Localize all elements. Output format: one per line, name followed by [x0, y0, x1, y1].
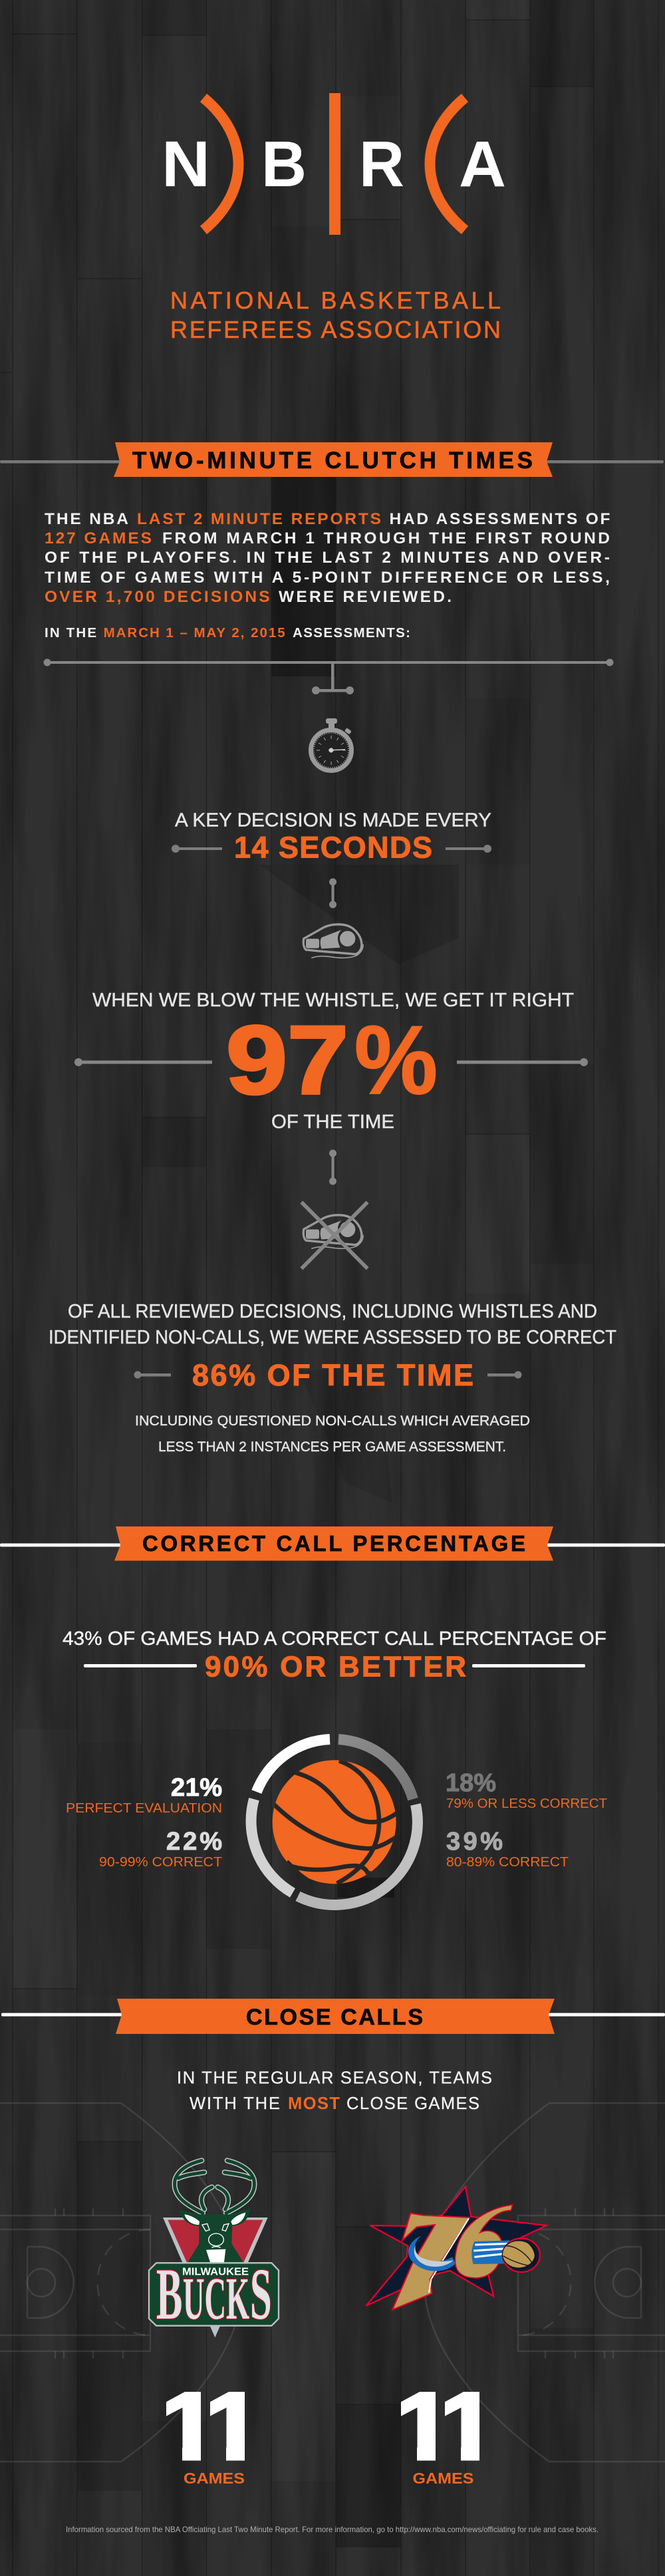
logo: NBRA: A — [459, 128, 506, 200]
footer source note: Information sourced from the NBA Officiating Last Two Minute Report. For more information, go to http://www.nba.com/news/officiating for rule and case books. — [66, 2525, 598, 2534]
label: 39% 80-89 correct — [446, 1828, 569, 1870]
logo: NBRA — [162, 93, 506, 235]
text: all reviewed decisions: IDENTIFIED NON-CALLS, WE WERE ASSESSED TO BE CORRECT — [49, 1327, 616, 1348]
logo: Milwaukee Bucks: MILWAUKEE — [182, 2267, 249, 2278]
label: games: GAMES — [412, 2470, 473, 2487]
number: 11 — [401, 2392, 479, 2461]
stat: 90% or better — [84, 1651, 585, 1683]
text: 43% of games: 43% OF GAMES HAD A CORRECT CALL PERCENTAGE OF — [63, 1628, 606, 1649]
text: regular season: CLOSE GAMES — [346, 2094, 479, 2113]
intro paragraph: TIME OF GAMES WITH A 5-POINT DIFFERENCE OR LESS, — [45, 569, 610, 587]
stat: 97%: % — [354, 1006, 438, 1114]
intro paragraph: 127 GAMES — [45, 529, 152, 547]
text: regular season: MOST — [288, 2094, 340, 2113]
section banner: two-minute clutch times: TWO-MINUTE CLUTCH TIMES — [132, 448, 533, 474]
icon: stopwatch — [311, 718, 352, 770]
stat: 76ers 11 games — [401, 2392, 479, 2484]
assessments subheading: MARCH 1 – MAY 2, 2015 — [104, 625, 285, 641]
stat: 90% or better: 90% OR BETTER — [205, 1651, 466, 1683]
label: 21% perfect evaluation: PERFECT EVALUATION — [66, 1800, 222, 1816]
assessments subheading — [45, 625, 410, 641]
donut segment: 18% 79 or less — [338, 1739, 413, 1799]
intro paragraph — [45, 510, 610, 606]
logo: NBRA: R — [359, 128, 404, 200]
organisation name: NATIONAL BASKETBALL — [170, 287, 501, 314]
logo: Milwaukee Bucks: B — [156, 2253, 182, 2335]
icon: basketball — [273, 1760, 399, 1887]
logo: NBRA: N — [162, 128, 210, 200]
icon: crossed-out whistle — [301, 1202, 368, 1268]
chart: donut with basketball — [251, 1739, 418, 1905]
section banner: close calls: CLOSE CALLS — [246, 2005, 423, 2030]
text: questioned non-calls: INCLUDING QUESTIONED NON-CALLS WHICH AVERAGED — [135, 1413, 530, 1429]
logo: NBRA: B — [261, 128, 307, 200]
intro paragraph: THE NBA — [45, 510, 128, 528]
label: games: GAMES — [184, 2470, 245, 2487]
text: questioned non-calls: LESS THAN 2 INSTANCES PER GAME ASSESSMENT. — [158, 1439, 506, 1455]
stat: 14 seconds: 14 SECONDS — [234, 830, 432, 865]
stat: 97% — [74, 1006, 588, 1114]
label: 21% perfect evaluation: 21% — [171, 1774, 222, 1802]
connector: tree — [44, 658, 613, 694]
text: all reviewed decisions — [49, 1301, 616, 1348]
label: 18% 79 or less: 79% OR LESS CORRECT — [446, 1796, 607, 1811]
logo: Milwaukee Bucks — [149, 2160, 279, 2337]
intro paragraph: OVER 1,700 DECISIONS — [45, 588, 270, 606]
label: 39% 80-89 correct: 39% — [446, 1828, 503, 1856]
stat: 97%: 97 — [226, 1006, 348, 1114]
intro paragraph: LAST 2 MINUTE REPORTS — [137, 510, 381, 528]
donut segment: 39% 80-89 correct — [298, 1804, 418, 1905]
text: regular season: WITH THE — [190, 2094, 280, 2113]
text: regular season — [177, 2069, 492, 2113]
logo: Philadelphia 76ers — [366, 2186, 547, 2310]
text: of the time: OF THE TIME — [271, 1111, 394, 1133]
number: 11: 1 — [202, 2374, 265, 2480]
text: blow the whistle: WHEN WE BLOW THE WHISTLE, WE GET IT RIGHT — [92, 990, 574, 1011]
intro paragraph: WERE REVIEWED. — [279, 588, 452, 606]
section banner: close calls — [1, 1999, 665, 2034]
section banner: correct call percentage: CORRECT CALL PERCENTAGE — [142, 1531, 525, 1556]
assessments subheading: ASSESSMENTS: — [293, 625, 410, 641]
text: regular season: IN THE REGULAR SEASON, TEAMS — [177, 2069, 492, 2087]
intro paragraph: FROM MARCH 1 THROUGH THE FIRST ROUND — [162, 529, 610, 547]
connector: to whistle — [329, 878, 336, 909]
label: 39% 80-89 correct: 80-89% CORRECT — [446, 1854, 569, 1870]
intro paragraph: OF THE PLAYOFFS. IN THE LAST 2 MINUTES AND OVER- — [45, 549, 610, 567]
logo: Milwaukee Bucks: UCK — [183, 2266, 249, 2332]
donut segment: 22% 90-99 correct — [251, 1799, 293, 1893]
stat: bucks 11 games — [166, 2392, 245, 2484]
connector: to crossed whistle — [329, 1149, 336, 1185]
intro paragraph: HAD ASSESSMENTS OF — [390, 510, 610, 528]
court lines watermark — [0, 2103, 665, 2462]
section banner: two-minute clutch times — [0, 442, 664, 477]
stat: 14 seconds — [172, 830, 491, 865]
text: questioned non-calls — [135, 1413, 530, 1455]
label: 18% 79 or less — [446, 1769, 607, 1811]
label: 18% 79 or less: 18% — [446, 1769, 496, 1797]
organisation name: REFEREES ASSOCIATION — [170, 316, 501, 343]
icon: whistle — [303, 925, 363, 958]
organisation name — [170, 287, 501, 343]
number: 11: 1 — [158, 2374, 221, 2480]
number: 11 — [166, 2392, 245, 2461]
number: 11: 1 — [393, 2374, 456, 2480]
donut segment: 21% perfect evaluation — [257, 1739, 330, 1792]
logo: Milwaukee Bucks: S — [250, 2253, 272, 2335]
section banner: correct call percentage — [0, 1526, 665, 1560]
label: 21% perfect evaluation — [66, 1774, 222, 1816]
text: key decision: A KEY DECISION IS MADE EVERY — [175, 810, 491, 831]
text: all reviewed decisions: OF ALL REVIEWED DECISIONS, INCLUDING WHISTLES AND — [68, 1301, 597, 1322]
label: 22% 90-99 correct: 90-99% CORRECT — [99, 1854, 222, 1870]
label: 22% 90-99 correct: 22% — [166, 1828, 222, 1856]
number: 11: 1 — [437, 2374, 500, 2480]
stat: 86% of the time: 86% OF THE TIME — [192, 1358, 473, 1392]
label: 22% 90-99 correct — [99, 1828, 222, 1870]
assessments subheading: IN THE — [45, 625, 96, 641]
